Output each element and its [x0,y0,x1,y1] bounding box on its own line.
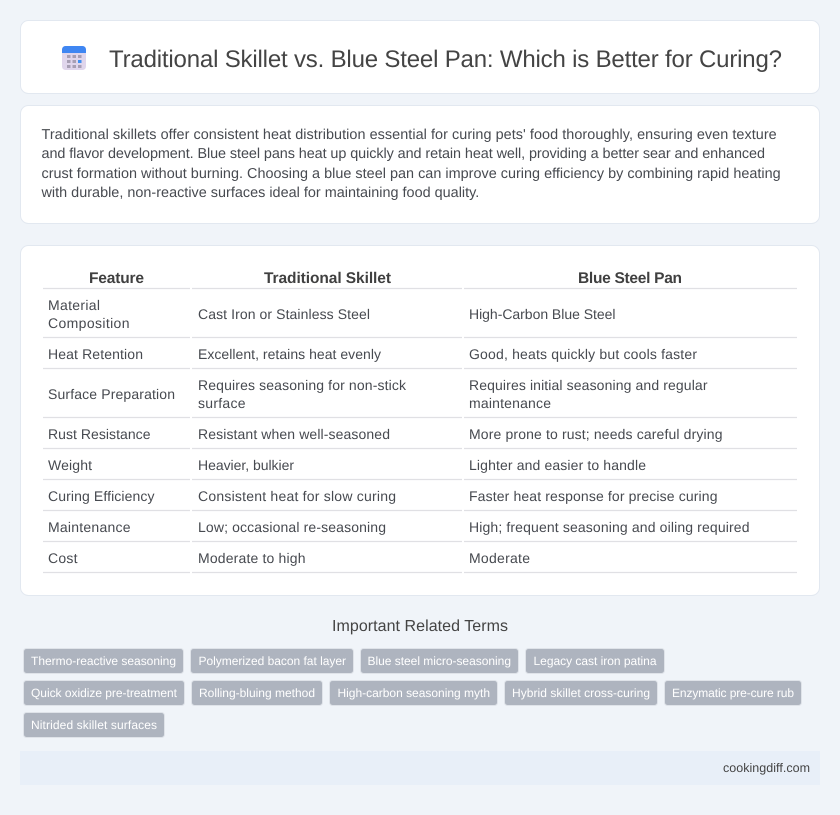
row: weight: Lighter and easier to handle [469,457,646,473]
panel: header [20,20,820,94]
related term tags: Quick oxidize pre-treatment [31,686,178,700]
row: weight [48,457,646,473]
row: curing efficiency: Faster heat response for precise curing [469,488,718,504]
row: cost: Moderate [469,550,530,566]
footer: cookingdiff.com [723,761,810,775]
related term tags: High-carbon seasoning myth [338,686,490,700]
related term tags: Polymerized bacon fat layer [198,654,346,668]
row: rust resistance [48,426,722,442]
row: curing efficiency: Consistent heat for slow curing [198,488,396,504]
related term tags: Blue steel micro-seasoning [368,654,511,668]
row: surface preparation: Requires initial seasoning and regular [469,377,708,393]
panel: comparison table [20,246,820,596]
related term tags: Enzymatic pre-cure rub [672,686,794,700]
table header: Blue Steel Pan [578,270,682,287]
row: cost [48,550,530,566]
title: Traditional Skillet vs. Blue Steel Pan: Which is Better for Curing? [109,46,782,73]
row: heat retention: Good, heats quickly but cools faster [469,346,697,362]
row: material composition [48,297,616,331]
row: maintenance: Low; occasional re-seasoning [198,519,386,535]
summary text [40,127,781,201]
related term tags: Legacy cast iron patina [534,654,657,668]
icon: calendar [62,46,86,70]
row: heat retention: Excellent, retains heat evenly [198,346,381,362]
row: material composition: Cast Iron or Stainless Steel [198,306,370,322]
related term tags: Nitrided skillet surfaces [31,718,157,732]
row: material composition: Material [48,297,100,313]
heading: important related terms: Important Related Terms [332,618,508,635]
summary text: with durable, non-reactive surfaces ideal for maintaining food quality. [40,185,479,201]
summary text: Traditional skillets offer consistent heat distribution essential for curing pets' food thoroughly, ensuring even texture [42,127,777,143]
related term tags [24,648,802,738]
summary text: and flavor development. Blue steel pans heat up quickly and retain heat well, providing a better sear and enhanced [42,146,765,162]
row: curing efficiency [48,488,718,504]
row: rust resistance: Resistant when well-seasoned [198,426,390,442]
row: material composition: High-Carbon Blue Steel [469,306,616,322]
row: surface preparation: maintenance [469,395,551,411]
table header: Traditional Skillet [264,270,391,287]
footer [20,751,820,785]
row: surface preparation [48,377,708,411]
row: cost: Cost [48,550,78,566]
summary text: crust formation without burning. Choosing a blue steel pan can improve curing efficiency by combining rapid heating [42,166,781,182]
row: cost: Moderate to high [198,550,306,566]
row: maintenance: Maintenance [48,519,131,535]
row: surface preparation: Requires seasoning for non-stick [198,377,407,393]
table header: Feature [89,270,144,287]
table header [89,270,682,287]
row: heat retention [48,346,697,362]
row: surface preparation: surface [198,395,246,411]
row: weight: Weight [48,457,92,473]
related term tags: Thermo-reactive seasoning [31,654,176,668]
row: material composition: Composition [48,315,130,331]
row: rust resistance: More prone to rust; needs careful drying [469,426,722,442]
related term tags: Hybrid skillet cross-curing [512,686,650,700]
row: maintenance: High; frequent seasoning and oiling required [469,519,750,535]
row: rust resistance: Rust Resistance [48,426,151,442]
row: curing efficiency: Curing Efficiency [48,488,154,504]
row: weight: Heavier, bulkier [198,457,294,473]
related term tags: Rolling-bluing method [199,686,315,700]
row: heat retention: Heat Retention [48,346,143,362]
row: maintenance [48,519,750,535]
panel: summary [20,106,820,224]
row: surface preparation: Surface Preparation [48,386,175,402]
